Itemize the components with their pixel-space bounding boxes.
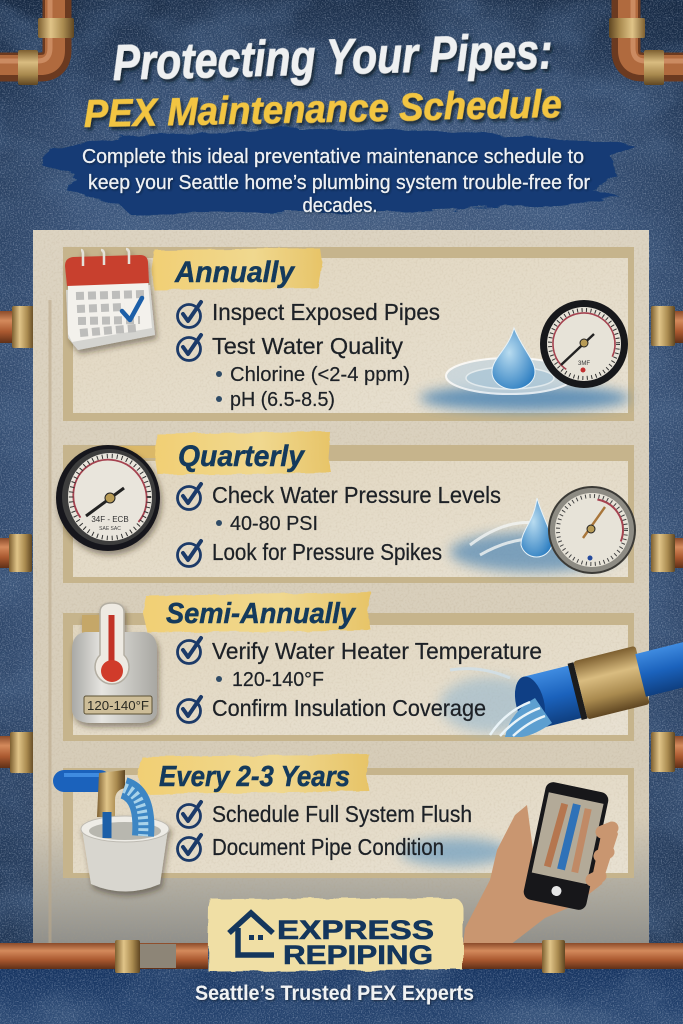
icon: calendar	[65, 249, 155, 350]
icon: water heater with thermometer: 120-140°F	[87, 698, 149, 713]
checklist: quarterly: Check Water Pressure Levels	[212, 482, 501, 508]
panel: semi-annually	[63, 592, 683, 741]
panel: quarterly	[56, 432, 635, 583]
subtitle on blue brush stroke: Complete this ideal preventative maintenance schedule to	[82, 146, 584, 168]
footer tagline: Seattle’s Trusted PEX Experts	[195, 982, 474, 1005]
icon: pressure gauge right	[549, 487, 635, 573]
water splash	[420, 358, 630, 411]
icon: hose and bucket	[64, 770, 169, 892]
icon: phone in hand	[463, 781, 618, 945]
checklist: annually: Chlorine (<2-4 ppm)	[230, 363, 410, 386]
logo text: EXPRESS	[277, 915, 434, 945]
icon: pressure gauge left	[56, 445, 161, 551]
subtitle on blue brush stroke: keep your Seattle home’s plumbing system trouble-free for	[88, 172, 590, 194]
icon: pressure gauge left: 34F - ECB	[91, 515, 129, 524]
subtitle on blue brush stroke: decades.	[302, 195, 378, 217]
icon: pressure gauge left: SAE SAC	[99, 526, 121, 532]
heading: semi-annually	[143, 592, 372, 633]
corner pipe: top right	[609, 0, 683, 85]
checklist: every 2-3 years: Schedule Full System Flush	[212, 801, 472, 827]
icon: water drop	[521, 498, 552, 557]
icon: water drop	[492, 328, 535, 389]
checklist: semi-annually: Verify Water Heater Temperature	[212, 638, 542, 664]
heading: quarterly: Quarterly	[178, 440, 305, 473]
water splash	[440, 677, 540, 733]
heading: annually: Annually	[174, 256, 295, 289]
checklist: semi-annually	[178, 638, 542, 722]
title: Protecting Your Pipes:	[112, 23, 553, 91]
icon: water heater with thermometer	[72, 603, 157, 723]
icon: pressure gauge: 3MF	[578, 361, 590, 367]
checklist: annually: Inspect Exposed Pipes	[212, 299, 440, 325]
checklist: semi-annually: Confirm Insulation Coverage	[212, 695, 486, 721]
checklist: annually	[178, 299, 440, 411]
logo text	[277, 915, 434, 970]
icon: house	[229, 913, 274, 955]
side pipe stubs	[0, 306, 683, 773]
panel: annually	[63, 247, 634, 421]
checklist: quarterly	[178, 482, 501, 566]
heading: every 2-3 years: Every 2-3 Years	[159, 761, 350, 793]
checklist: quarterly: 40-80 PSI	[230, 512, 318, 535]
icon: blue hose with brass fitting	[450, 629, 683, 737]
bottom copper pipe	[0, 940, 683, 973]
logo text: REPIPING	[283, 940, 433, 970]
checklist: semi-annually: 120-140°F	[232, 668, 324, 691]
logo plate	[208, 898, 463, 971]
title	[83, 23, 562, 136]
icon: pressure gauge	[540, 300, 628, 388]
heading: annually	[152, 248, 322, 290]
checklist: every 2-3 years: Document Pipe Condition	[212, 834, 444, 860]
panel: every 2-3 years	[63, 754, 634, 945]
checklist: quarterly: Look for Pressure Spikes	[212, 539, 442, 565]
checklist: annually: pH (6.5-8.5)	[230, 388, 335, 411]
title: PEX Maintenance Schedule	[83, 83, 562, 136]
heading: semi-annually: Semi-Annually	[166, 598, 357, 630]
water splash	[450, 522, 620, 572]
corner pipe: top left	[0, 0, 74, 85]
checklist: annually: Test Water Quality	[212, 333, 403, 359]
subtitle on blue brush stroke	[42, 129, 636, 217]
heading: quarterly	[100, 432, 331, 475]
water splash	[400, 838, 510, 866]
checklist: every 2-3 years	[178, 801, 472, 860]
paper background panel	[33, 230, 649, 946]
